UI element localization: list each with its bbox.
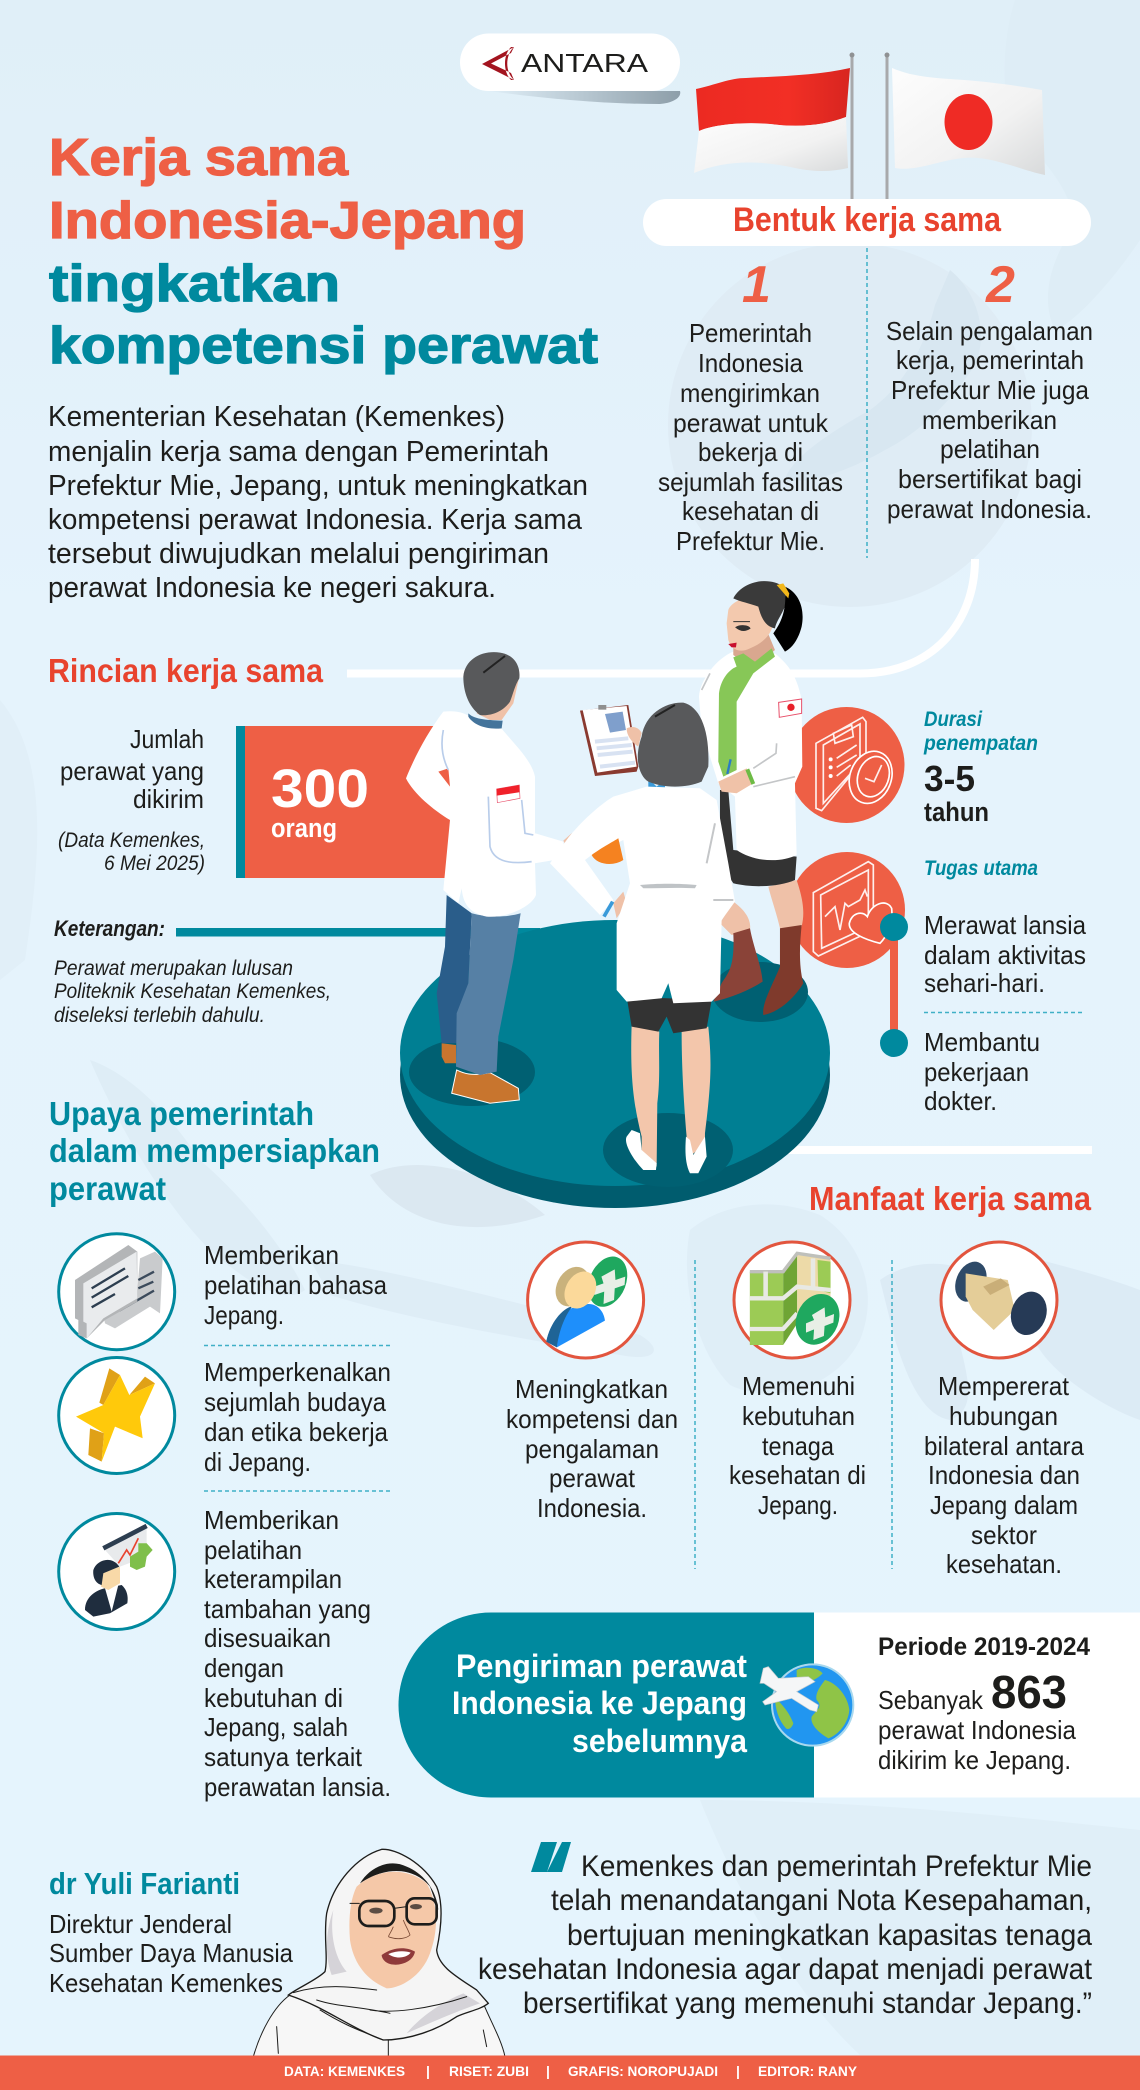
panel: Bentuk kerja sama: Indonesia: [698, 348, 803, 378]
banner: pengiriman perawat sebelumnya: perawat Indonesia: [878, 1715, 1077, 1745]
icon: speech bubbles: [59, 1234, 175, 1350]
banner: pengiriman perawat sebelumnya: Pengiriman perawat: [456, 1648, 747, 1684]
nurse: front, rear view: [550, 703, 735, 1173]
label: jumlah perawat: 6 Mei 2025): [104, 852, 205, 875]
speaker name: dr Yuli Farianti: Direktur Jenderal: [49, 1909, 232, 1939]
heading: Upaya pemerintah: dalam mempersiapkan: [49, 1132, 380, 1169]
text: pelatihan bahasa: Memberikan: [204, 1240, 339, 1270]
heading: Rincian kerja sama: Rincian kerja sama: [48, 652, 324, 689]
text: pelatihan bahasa: pelatihan bahasa: [204, 1270, 387, 1300]
platform with nurses: [400, 581, 830, 1208]
panel: Bentuk kerja sama: kerja, pemerintah: [896, 345, 1084, 375]
text: mempererat hubungan: sektor: [971, 1520, 1037, 1550]
note: Keterangan: diseleksi terlebih dahulu.: [54, 1004, 265, 1027]
panel: Bentuk kerja sama: mengirimkan: [680, 378, 820, 408]
text: memenuhi kebutuhan: Jepang.: [758, 1490, 838, 1520]
icon: star: [59, 1358, 175, 1474]
footer credits: [0, 2056, 1140, 2090]
text: pelatihan keterampilan: satunya terkait: [204, 1742, 363, 1772]
text: mempererat hubungan: Mempererat: [938, 1371, 1070, 1401]
text: pelatihan keterampilan: keterampilan: [204, 1564, 342, 1594]
text: pelatihan keterampilan: perawatan lansia.: [204, 1772, 391, 1802]
logo badge: ANTARA: ANTARA: [521, 48, 649, 78]
text: durasi penempatan: tahun: [924, 797, 989, 827]
logo badge: ANTARA: [460, 34, 680, 104]
text: tugas utama: Merawat lansia: [924, 910, 1086, 940]
text: mempererat hubungan: Indonesia dan: [928, 1460, 1080, 1490]
text: pelatihan keterampilan: Memberikan: [204, 1505, 339, 1535]
quote: [478, 1842, 1093, 2020]
quote: Kemenkes dan pemerintah Prefektur Mie: [581, 1850, 1092, 1883]
label: jumlah perawat: [58, 724, 205, 875]
banner: pengiriman perawat sebelumnya: sebelumnya: [572, 1723, 747, 1759]
panel: Bentuk kerja sama: sejumlah fasilitas: [658, 467, 843, 497]
speaker name: dr Yuli Farianti: Kesehatan Kemenkes: [49, 1968, 283, 1998]
text: mempererat hubungan: Jepang dalam: [930, 1490, 1078, 1520]
text: pelatihan bahasa: Jepang.: [204, 1300, 284, 1330]
quote: bersertifikat yang memenuhi standar Jepang.”: [523, 1987, 1092, 2020]
timeline markers: [880, 913, 908, 1057]
footer credits: |: [736, 2063, 740, 2079]
intro paragraph: [48, 401, 588, 604]
text: durasi penempatan: Durasi: [924, 708, 983, 731]
text: budaya dan etika: sejumlah budaya: [204, 1387, 386, 1417]
label: jumlah perawat: dikirim: [133, 784, 204, 814]
label: jumlah perawat: perawat yang: [60, 756, 204, 786]
text: meningkatkan kompetensi: pengalaman: [525, 1434, 659, 1464]
portrait: dr Yuli Farianti: [253, 1849, 505, 2057]
panel: Bentuk kerja sama: Selain pengalaman: [886, 316, 1093, 346]
footer credits: RISET: ZUBI: [449, 2063, 529, 2079]
title: Indonesia-Jepang: [49, 192, 526, 250]
text: meningkatkan kompetensi: perawat: [549, 1463, 636, 1493]
text: mempererat hubungan: bilateral antara: [924, 1431, 1084, 1461]
title: tingkatkan: [49, 255, 340, 313]
text: durasi penempatan: 3-5: [924, 758, 975, 799]
text: budaya dan etika: Memperkenalkan: [204, 1357, 391, 1387]
icon circle: durasi penempatan: [788, 707, 904, 823]
nurse: right, facing viewer: [699, 581, 803, 1015]
banner: pengiriman perawat sebelumnya: Sebanyak: [878, 1685, 984, 1715]
icon: person with plus: [528, 1242, 644, 1358]
footer credits: GRAFIS: NOROPUJADI: [568, 2063, 718, 2079]
note: Keterangan: [54, 916, 540, 1027]
intro paragraph: Kementerian Kesehatan (Kemenkes): [48, 401, 505, 433]
icon: map with plus: [734, 1242, 850, 1358]
label: jumlah perawat: (Data Kemenkes,: [58, 829, 205, 852]
note: Keterangan: Keterangan:: [54, 916, 165, 941]
clipboard: [580, 705, 642, 776]
text: budaya dan etika: dan etika bekerja: [204, 1417, 388, 1447]
icon: globe with airplane: [760, 1664, 853, 1746]
text: meningkatkan kompetensi: [506, 1374, 678, 1523]
panel: Bentuk kerja sama: bersertifikat bagi: [898, 464, 1082, 494]
icon: handshake: [941, 1242, 1057, 1358]
panel: Bentuk kerja sama: memberikan: [922, 405, 1057, 435]
text: durasi penempatan: [923, 708, 1038, 827]
text: budaya dan etika: di Jepang.: [204, 1447, 311, 1477]
note: Keterangan: Perawat merupakan lulusan: [54, 957, 293, 980]
text: memenuhi kebutuhan: tenaga: [762, 1431, 834, 1461]
intro paragraph: perawat Indonesia ke negeri sakura.: [48, 572, 496, 604]
panel: Bentuk kerja sama: kesehatan di: [682, 496, 819, 526]
stat bar: 300 orang: [236, 726, 455, 878]
heading: Upaya pemerintah: perawat: [49, 1170, 166, 1207]
text: pelatihan bahasa: [204, 1240, 390, 1346]
note: Keterangan: Politeknik Kesehatan Kemenkes,: [54, 980, 331, 1003]
intro paragraph: menjalin kerja sama dengan Pemerintah: [48, 436, 549, 468]
text: meningkatkan kompetensi: Meningkatkan: [515, 1374, 668, 1404]
text: pelatihan keterampilan: [204, 1505, 391, 1802]
text: pelatihan keterampilan: pelatihan: [204, 1535, 302, 1565]
text: meningkatkan kompetensi: Indonesia.: [537, 1493, 647, 1523]
banner: pengiriman perawat sebelumnya: Indonesia ke Jepang: [452, 1685, 747, 1721]
text: memenuhi kebutuhan: kebutuhan: [742, 1401, 855, 1431]
label: jumlah perawat: Jumlah: [130, 724, 204, 754]
text: tugas utama: [924, 857, 1086, 1116]
panel: Bentuk kerja sama: Bentuk kerja sama: [733, 201, 1002, 239]
stat bar: 300 orang: 300: [271, 759, 369, 819]
text: pelatihan keterampilan: kebutuhan di: [204, 1683, 343, 1713]
text: pelatihan keterampilan: tambahan yang: [204, 1594, 371, 1624]
footer credits: |: [546, 2063, 550, 2079]
stat bar: 300 orang: orang: [271, 813, 337, 843]
quote: telah menandatangani Nota Kesepahaman,: [551, 1884, 1092, 1917]
text: memenuhi kebutuhan: kesehatan di: [729, 1460, 866, 1490]
title: Kerja sama: [49, 129, 349, 187]
text: pelatihan keterampilan: disesuaikan: [204, 1623, 331, 1653]
panel: Bentuk kerja sama: 2: [985, 256, 1015, 314]
text: mempererat hubungan: [924, 1371, 1084, 1579]
footer credits: EDITOR: RANY: [758, 2063, 858, 2079]
text: tugas utama: dokter.: [924, 1086, 997, 1116]
text: tugas utama: dalam aktivitas: [924, 940, 1086, 970]
divider lines between benefits: [695, 1260, 892, 1569]
text: tugas utama: sehari-hari.: [924, 968, 1045, 998]
intro paragraph: kompetensi perawat Indonesia. Kerja sama: [48, 504, 583, 536]
icon: skills chart and businessman: [59, 1514, 175, 1630]
text: tugas utama: pekerjaan: [924, 1057, 1029, 1087]
title: [49, 129, 598, 375]
speaker name: dr Yuli Farianti: dr Yuli Farianti: [49, 1866, 240, 1901]
text: memenuhi kebutuhan: [729, 1371, 866, 1520]
text: tugas utama: Membantu: [924, 1027, 1040, 1057]
quotation mark: [531, 1842, 571, 1872]
panel: Bentuk kerja sama: 1: [742, 256, 771, 314]
speaker name: dr Yuli Farianti: Sumber Daya Manusia: [49, 1938, 293, 1968]
text: tugas utama: Tugas utama: [924, 857, 1038, 880]
panel: Bentuk kerja sama: perawat Indonesia.: [887, 494, 1092, 524]
text: pelatihan keterampilan: dengan: [204, 1653, 284, 1683]
banner: pengiriman perawat sebelumnya: dikirim ke Jepang.: [878, 1745, 1071, 1775]
quote: bertujuan meningkatkan kapasitas tenaga: [567, 1919, 1093, 1952]
connector line: Rincian: [347, 559, 975, 674]
banner: pengiriman perawat sebelumnya: [398, 1612, 1140, 1798]
panel: Bentuk kerja sama: bekerja di: [698, 437, 803, 467]
flags: Indonesia and Japan: [694, 52, 1045, 200]
intro paragraph: tersebut diwujudkan melalui pengiriman: [48, 538, 549, 570]
heading: Upaya pemerintah: [49, 1095, 380, 1207]
speaker name: dr Yuli Farianti: [49, 1866, 293, 1998]
panel: Bentuk kerja sama: Prefektur Mie juga: [891, 375, 1090, 405]
text: durasi penempatan: penempatan: [923, 732, 1038, 755]
panel: Bentuk kerja sama: Pemerintah: [689, 318, 812, 348]
divider line: Manfaat: [780, 1146, 1092, 1154]
text: pelatihan keterampilan: Jepang, salah: [204, 1712, 348, 1742]
footer credits: |: [426, 2063, 430, 2079]
banner: pengiriman perawat sebelumnya: Periode 2019-2024: [878, 1633, 1090, 1661]
text: mempererat hubungan: hubungan: [949, 1401, 1058, 1431]
icon circle: tugas utama: [789, 852, 905, 968]
intro paragraph: Prefektur Mie, Jepang, untuk meningkatkan: [48, 470, 588, 502]
panel: Bentuk kerja sama: [643, 199, 1093, 558]
heading: Manfaat kerja sama: Manfaat kerja sama: [809, 1180, 1092, 1217]
heading: Upaya pemerintah: Upaya pemerintah: [49, 1095, 314, 1132]
panel: Bentuk kerja sama: pelatihan: [940, 434, 1040, 464]
panel: Bentuk kerja sama: perawat untuk: [673, 408, 829, 438]
footer credits: DATA: KEMENKES: [284, 2063, 405, 2079]
text: mempererat hubungan: kesehatan.: [946, 1549, 1062, 1579]
title: kompetensi perawat: [49, 317, 598, 375]
text: budaya dan etika: [204, 1357, 391, 1491]
banner: pengiriman perawat sebelumnya: 863: [991, 1666, 1067, 1718]
nurse: left, rear view: [406, 652, 575, 1103]
text: memenuhi kebutuhan: Memenuhi: [742, 1371, 855, 1401]
panel: Bentuk kerja sama: Prefektur Mie.: [676, 526, 825, 556]
quote: kesehatan Indonesia agar dapat menjadi perawat: [478, 1953, 1092, 1986]
text: meningkatkan kompetensi: kompetensi dan: [506, 1404, 678, 1434]
